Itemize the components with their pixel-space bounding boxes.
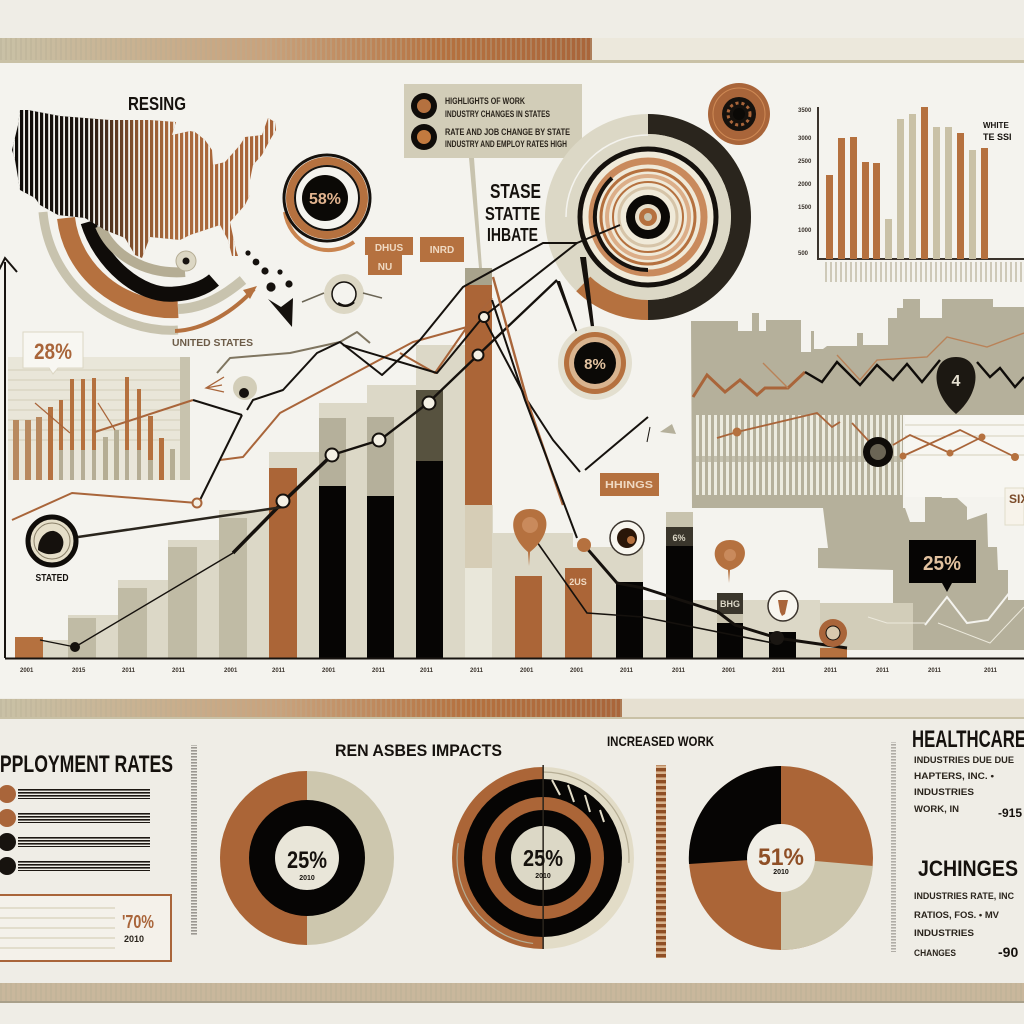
x axis labels: 2011 (928, 668, 942, 674)
vertical divider (191, 745, 197, 935)
text block: healthcare: INDUSTRIES DUE DUE (914, 755, 1014, 765)
x axis labels: 2001 (520, 668, 534, 674)
x axis labels: 2011 (876, 668, 890, 674)
donut: 58%: 58% (309, 191, 341, 208)
text block: healthcare: WORK, IN (914, 804, 959, 814)
tag: right edge (1005, 488, 1024, 525)
bar chart: top right: 2500 (798, 159, 812, 165)
main bar chart (5, 268, 1024, 658)
concentric chart: 25% (452, 765, 634, 949)
donut: 8% (558, 326, 632, 400)
donut: 25%: 25% (287, 847, 327, 874)
vertical divider (656, 765, 666, 958)
labels: small tags: INRD (430, 245, 454, 256)
heading: increased work: INCREASED WORK (607, 733, 714, 749)
bar chart: top right: 3000 (798, 136, 812, 142)
map: united states (12, 110, 276, 258)
x axis labels: 2001 (224, 668, 238, 674)
text block: healthcare: HAPTERS, INC. • (914, 771, 994, 781)
heading: state impacts: STATTE (485, 204, 540, 224)
legend panel top (404, 84, 582, 268)
bar chart: top right: 500 (798, 251, 809, 257)
legend panel top: RATE AND JOB CHANGE BY STATE (445, 127, 570, 137)
legend panel top: INDUSTRY CHANGES IN STATES (445, 109, 550, 119)
right panel: line charts and markers: 4 (952, 373, 961, 390)
bar chart: top right: 1000 (798, 228, 812, 234)
main panel background (0, 63, 1024, 698)
icon: state marker (28, 517, 76, 584)
x axis labels (20, 668, 998, 674)
x axis labels: 2011 (272, 668, 286, 674)
labels: small tags (365, 237, 464, 275)
y axis arrow (0, 258, 17, 658)
pin icons over bars (513, 509, 847, 647)
donut: 58% (284, 155, 370, 250)
right panel: skyline background (691, 299, 1024, 650)
heading: rising: RESING (128, 94, 186, 114)
x axis labels: 2001 (722, 668, 736, 674)
text block: changes: INDUSTRIES RATE, INC (914, 891, 1014, 901)
x axis labels: 2011 (122, 668, 136, 674)
callout box: 70% (0, 895, 171, 961)
bar chart: top right: 1500 (798, 205, 812, 211)
x axis labels: 2001 (20, 668, 34, 674)
icon: top medallion (708, 83, 770, 145)
pie chart: 51%: 51% (758, 844, 804, 871)
main bar chart: 2US (569, 577, 587, 587)
pointer wedges (556, 257, 595, 334)
x axis labels: 2011 (772, 668, 786, 674)
x axis labels: 2011 (620, 668, 634, 674)
heading: state impacts: STASE (490, 181, 541, 203)
legend panel top: INDUSTRY AND EMPLOY RATES HIGH (445, 139, 567, 149)
pie chart: 51%: 2010 (773, 869, 789, 876)
main bar chart: BHG (720, 599, 740, 609)
x axis labels: 2011 (470, 668, 484, 674)
x axis labels: 2011 (372, 668, 386, 674)
heading: state impacts: IHBATE (487, 225, 538, 245)
callout box: 70%: 2010 (124, 934, 144, 944)
x axis labels: 2011 (984, 668, 998, 674)
heading: state impacts (485, 181, 541, 245)
small stray marks (660, 424, 676, 434)
x axis labels: 2015 (72, 668, 86, 674)
text block: changes (914, 856, 1018, 960)
text block: healthcare: -915 (998, 806, 1022, 820)
text block: changes: -90 (998, 944, 1018, 960)
bar chart: top right: 2000 (798, 182, 812, 188)
x axis labels: 2011 (420, 668, 434, 674)
concentric chart: 25%: 2010 (535, 873, 551, 880)
right panel: line charts and markers (693, 333, 1024, 467)
x axis labels: 2001 (570, 668, 584, 674)
arc gauge under map (43, 212, 257, 331)
target circle chart (545, 114, 751, 320)
callout box: 70%: '70% (122, 912, 154, 932)
small bar chart: left with 28% tag: 28% (34, 339, 72, 364)
legend list: employment rates (0, 785, 150, 875)
x axis labels: 2011 (824, 668, 838, 674)
tag: changes (600, 473, 659, 496)
heading: increases impacts: REN ASBES IMPACTS (335, 741, 502, 760)
labels: small tags: DHUS (375, 243, 403, 254)
donut: 25% (220, 771, 394, 945)
trend line markers (71, 312, 784, 651)
vertical divider (891, 742, 896, 952)
text block: changes: RATIOS, FOS. • MV (914, 910, 999, 920)
bar chart: top right: WHITE (983, 121, 1009, 130)
concentric chart: 25%: 25% (523, 845, 563, 871)
labels: small tags: NU (378, 262, 392, 273)
donut: 8%: 8% (584, 356, 606, 373)
icon: markers centre-left (206, 274, 382, 400)
bar chart: top right (798, 107, 1024, 282)
text block: changes: CHANGES (914, 948, 956, 958)
trend lines (12, 225, 847, 648)
map pin and dots (176, 250, 293, 327)
lower decorative band (0, 699, 1024, 719)
callout: 25%: 25% (923, 553, 961, 575)
bar chart: top right: 3500 (798, 108, 812, 114)
top decorative band (0, 38, 1024, 63)
bottom decorative band (0, 983, 1024, 1003)
icon: state marker: STATED (36, 573, 68, 584)
label: united states: UNITED STATES (172, 338, 253, 349)
bar chart: top right: TE SSI (983, 132, 1012, 142)
legend panel top: HIGHLIGHTS OF WORK (445, 96, 525, 106)
pie chart: 51% (689, 766, 873, 950)
x axis labels: 2011 (172, 668, 186, 674)
main bar chart: 6% (672, 533, 686, 543)
heading: employment rates: IPPLOYMENT RATES (0, 751, 173, 778)
x axis labels: 2011 (672, 668, 686, 674)
tag: changes: HHINGS (605, 480, 653, 491)
axes (5, 658, 1024, 660)
x axis labels: 2001 (322, 668, 336, 674)
small bar chart: left with 28% tag (8, 332, 242, 480)
donut: 25%: 2010 (299, 875, 315, 882)
text block: healthcare (912, 726, 1024, 820)
text block: healthcare: INDUSTRIES (914, 787, 974, 797)
callout: 25% (868, 540, 1024, 643)
text block: changes: INDUSTRIES (914, 928, 974, 938)
